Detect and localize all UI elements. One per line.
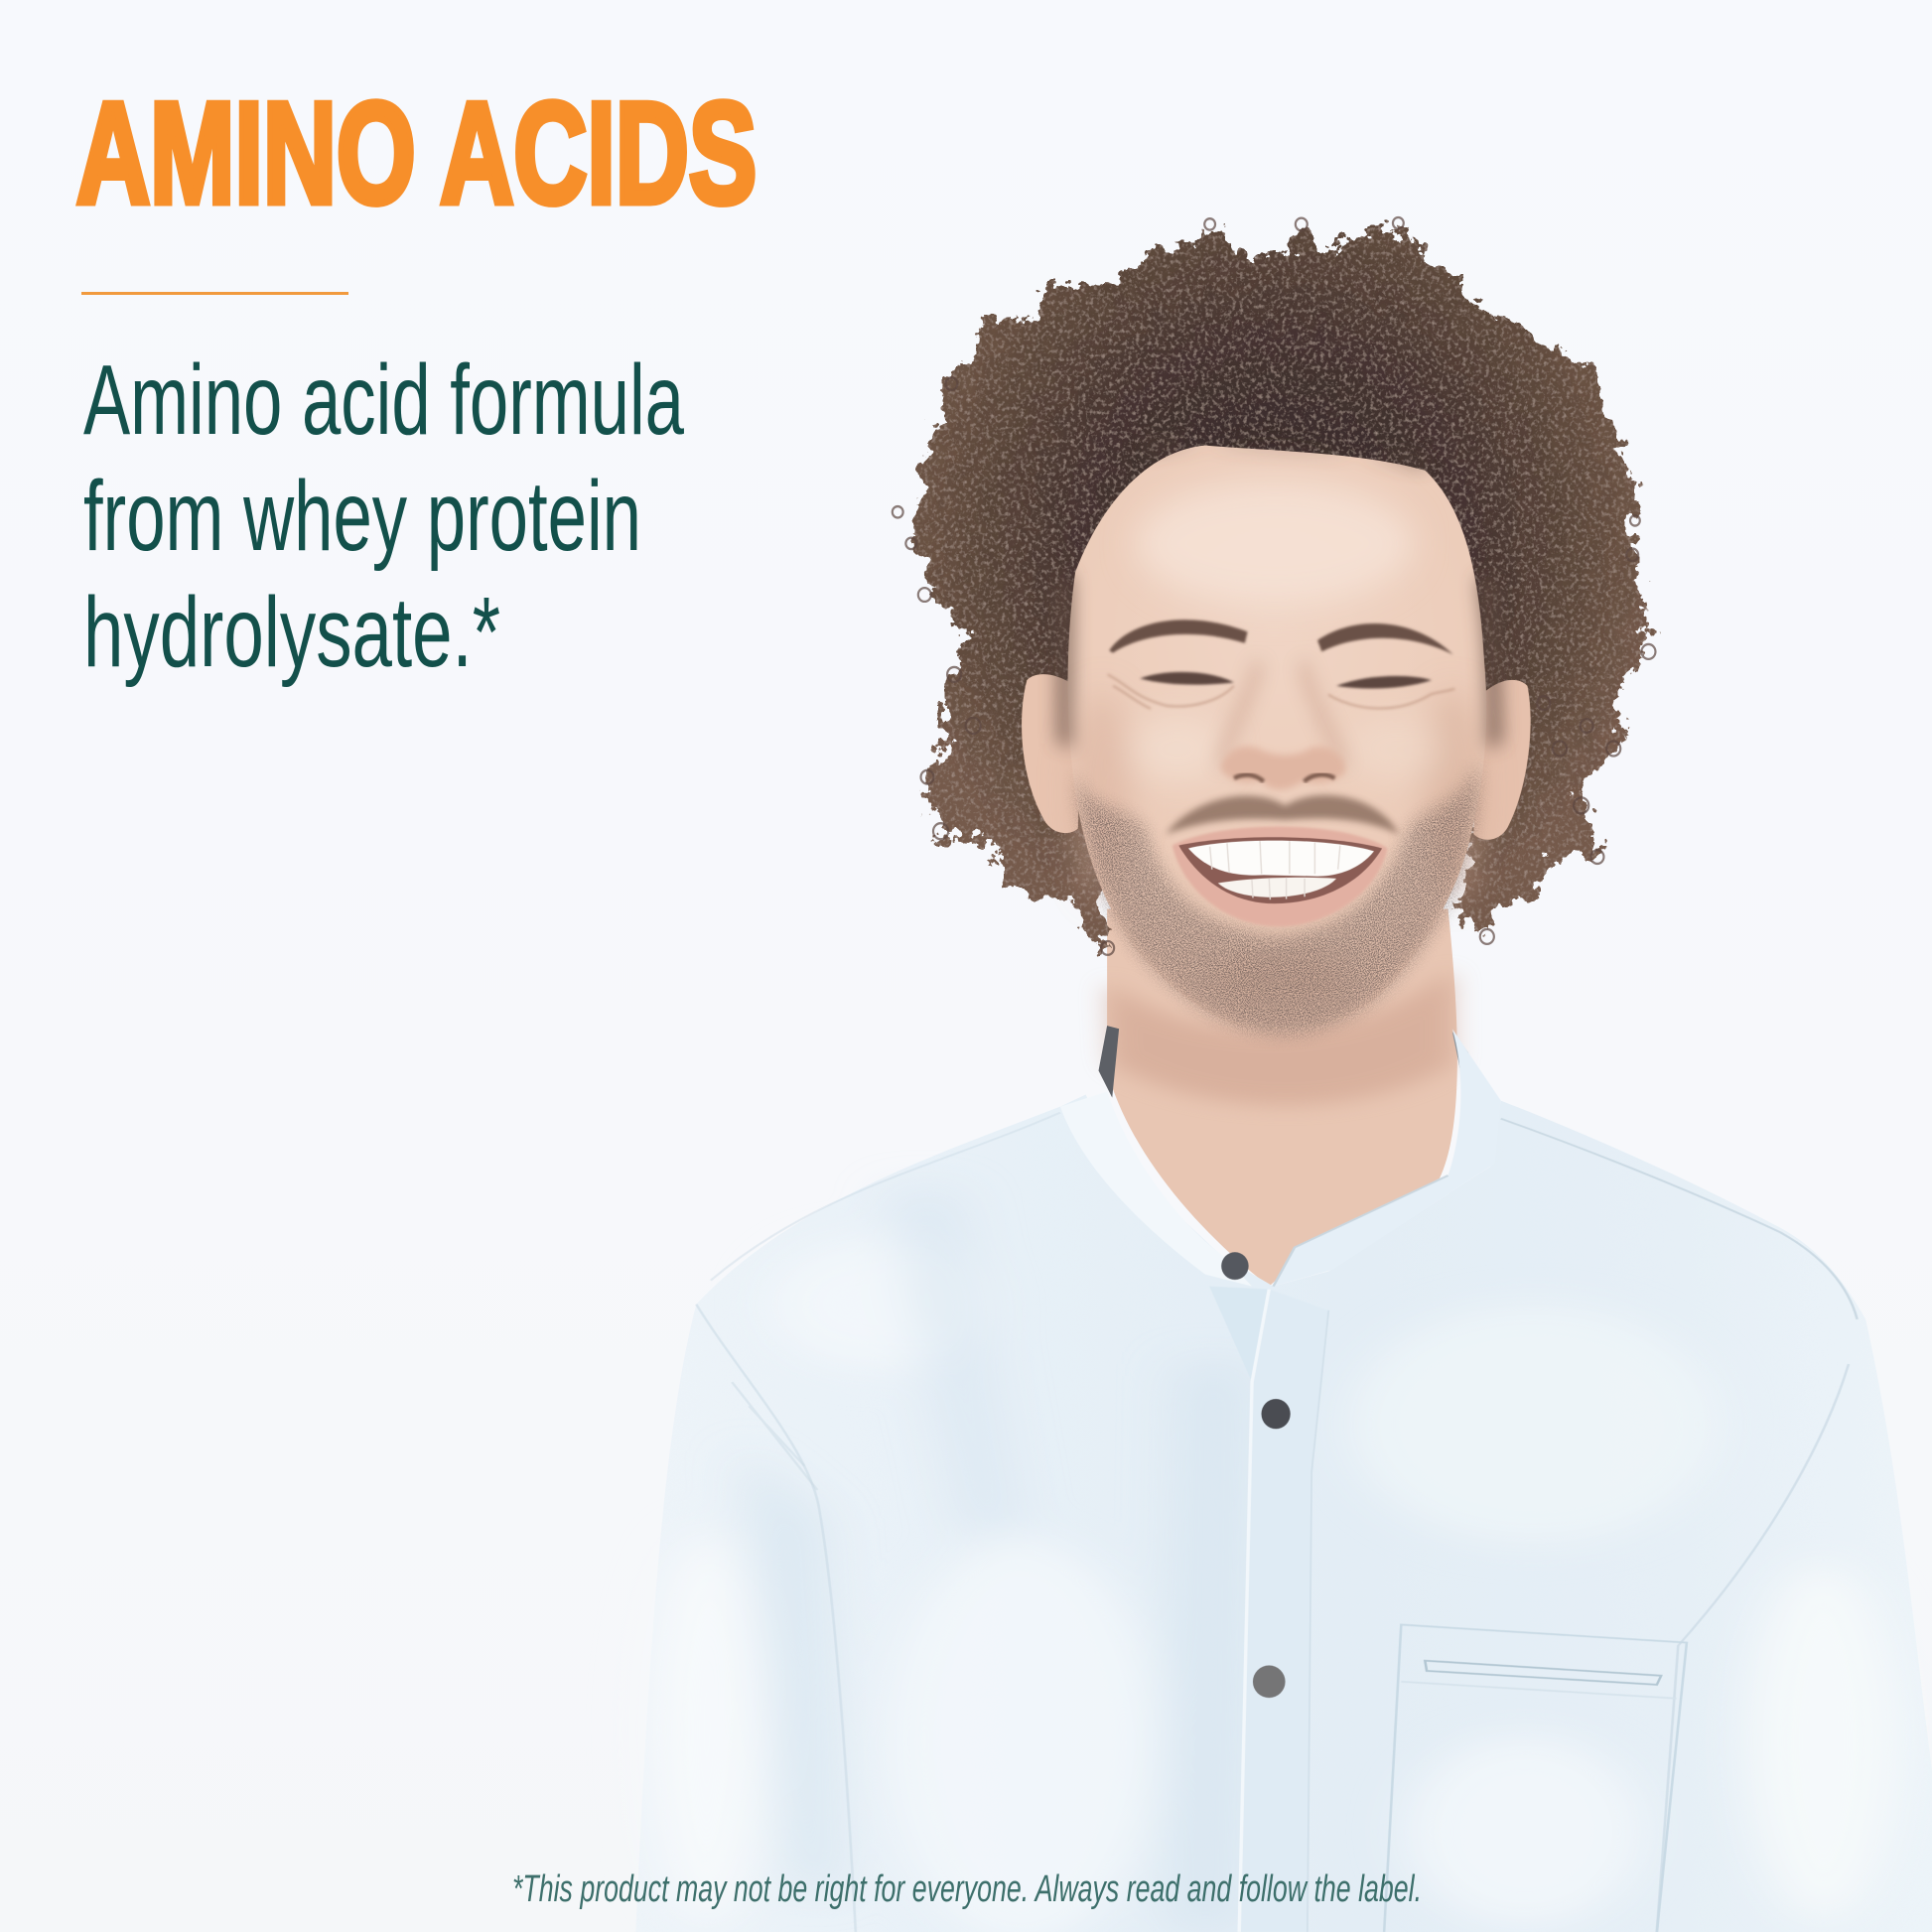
- shirt highlights: [647, 1190, 1900, 1932]
- upper teeth: [1188, 841, 1374, 877]
- nose: [1220, 663, 1345, 789]
- lower teeth: [1218, 878, 1336, 897]
- hair: [913, 227, 1646, 954]
- face: [1067, 446, 1486, 1034]
- sleeve seams: [696, 1113, 1858, 1932]
- mouth: [1173, 827, 1388, 926]
- left eye: [1140, 672, 1234, 685]
- pocket: [1384, 1624, 1687, 1932]
- mouth interior: [1178, 837, 1382, 903]
- collar: [1060, 1092, 1252, 1287]
- body text: hydrolysate.*: [83, 577, 500, 688]
- left ear: [1022, 674, 1081, 833]
- shirt body: [635, 1095, 1932, 1932]
- right ear: [1473, 680, 1531, 840]
- placket: [1239, 1290, 1328, 1932]
- button 2: [1261, 1399, 1291, 1429]
- neck shadow: [1107, 969, 1452, 1105]
- right eyebrow: [1317, 623, 1453, 654]
- head: [893, 217, 1655, 1035]
- divider rule: [81, 292, 348, 295]
- face shading: [1072, 481, 1481, 1000]
- person photo: [635, 217, 1932, 1932]
- right eye: [1336, 676, 1432, 688]
- collar inner shadow: [1099, 1026, 1119, 1098]
- temple hair shadow: [1056, 441, 1503, 749]
- body text: from whey protein: [83, 461, 641, 572]
- hair curls: [893, 217, 1655, 955]
- body text: [83, 345, 684, 688]
- button 1: [1221, 1252, 1249, 1280]
- neck: [1107, 909, 1457, 1287]
- button 3: [1253, 1666, 1286, 1698]
- left eyebrow: [1109, 620, 1248, 653]
- eye creases: [1108, 674, 1454, 709]
- footnote disclaimer: *This product may not be right for everyone. Always read and follow the label.: [512, 1868, 1422, 1910]
- tooth gaps: [1210, 841, 1340, 899]
- shirt linen texture: [635, 1095, 1932, 1932]
- title: AMINO ACIDS: [76, 71, 757, 233]
- body text: Amino acid formula: [83, 345, 684, 456]
- lips: [1173, 827, 1388, 926]
- beard: [1075, 759, 1479, 1035]
- mustache: [1166, 795, 1399, 834]
- shirt and neck: [635, 909, 1932, 1932]
